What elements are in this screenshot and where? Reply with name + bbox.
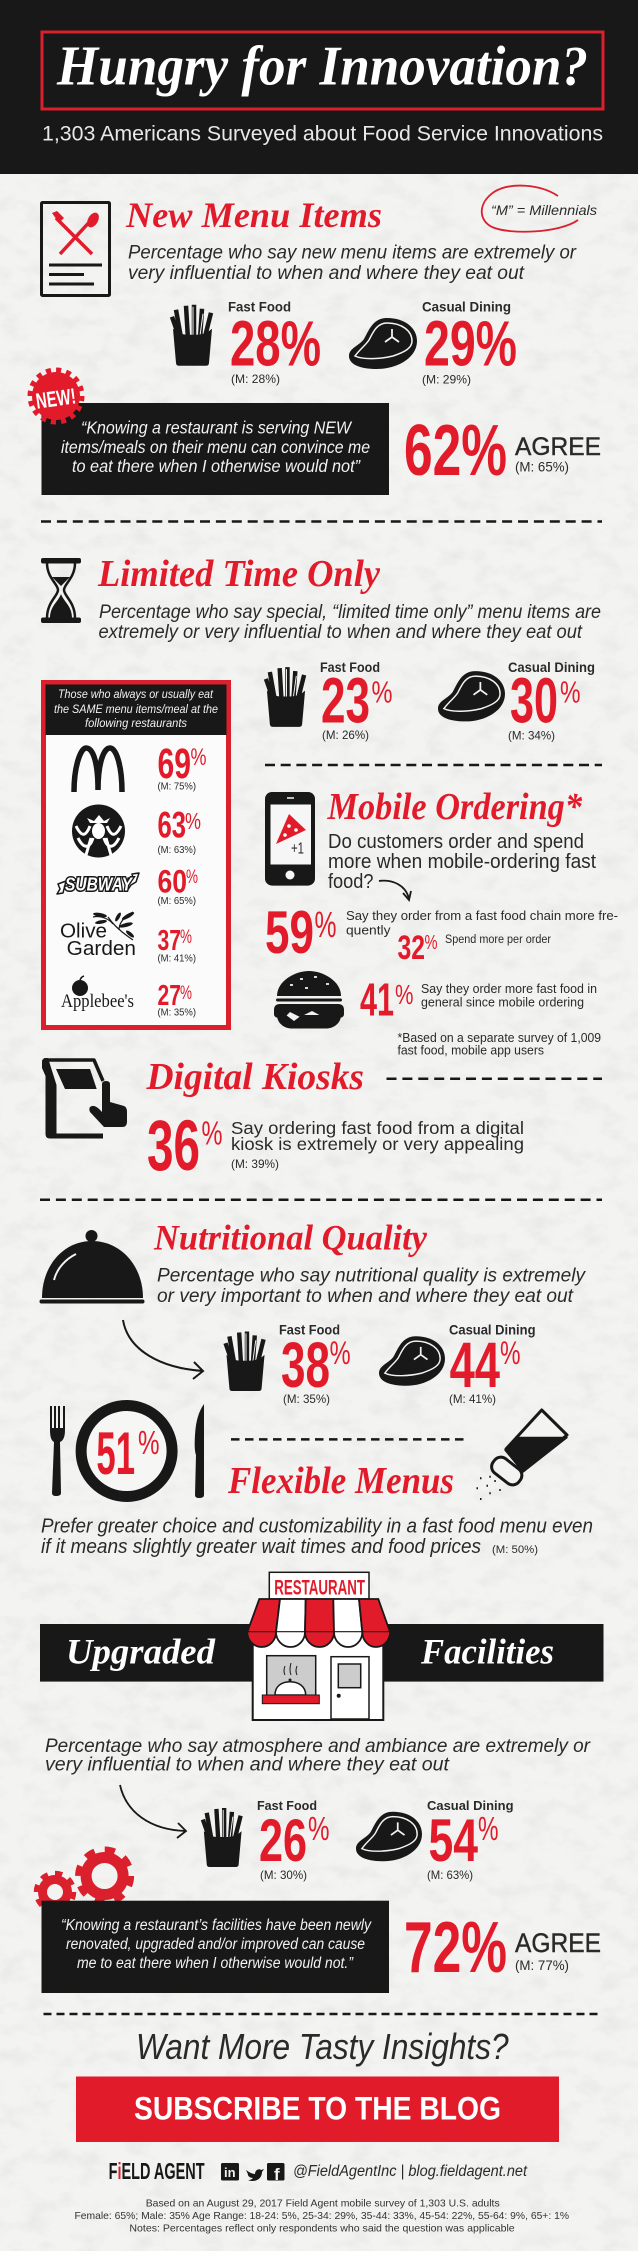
panel header: the SAME menu items/meal at the xyxy=(54,702,218,716)
stat: fast food: (M: 28%) xyxy=(231,372,280,386)
quote box xyxy=(42,1901,389,1993)
stat: 72% agree: (M: 77%) xyxy=(515,1957,569,1973)
description xyxy=(41,1516,593,1558)
stat: 59%: Say they order from a fast food chain more fre- xyxy=(346,908,618,923)
stat: 36%: % xyxy=(202,1115,222,1152)
description: extremely or very influential to when and where they eat out xyxy=(98,622,583,643)
stat: 32%: Spend more per order xyxy=(445,934,551,946)
arrow xyxy=(120,1785,186,1838)
logo: Applebee's: Applebee's xyxy=(61,991,134,1012)
description xyxy=(157,1266,587,1307)
icon: facebook xyxy=(267,2163,284,2184)
description xyxy=(231,1118,524,1171)
survey notes xyxy=(74,2198,569,2235)
stat: casual dining: 54 xyxy=(428,1807,478,1874)
description: Say ordering fast food from a digital xyxy=(231,1118,524,1138)
arrow xyxy=(379,881,411,900)
badge: new xyxy=(30,370,82,422)
footnote: fast food, mobile app users xyxy=(398,1043,544,1058)
stat: casual dining: Casual Dining xyxy=(427,1798,514,1813)
stat: Olive Garden: 37 xyxy=(158,925,181,957)
stat: 62% agree: 62% xyxy=(404,411,507,491)
stat: casual dining xyxy=(356,1798,514,1882)
description xyxy=(98,602,601,643)
quote box xyxy=(42,403,389,495)
description: very influential to when and where they eat out xyxy=(128,263,525,284)
question: more when mobile-ordering fast xyxy=(328,851,596,873)
subtitle: 1,303 Americans Surveyed about Food Service Innovations xyxy=(42,122,603,145)
stat: 62% agree: (M: 65%) xyxy=(515,460,569,474)
stat: fast food: % xyxy=(308,1810,330,1847)
icon: burger xyxy=(274,971,344,1028)
heading banner: Upgraded xyxy=(66,1632,216,1672)
survey notes: Based on an August 29, 2017 Field Agent mobile survey of 1,303 U.S. adults xyxy=(146,2198,500,2210)
stat: 32%: 32 xyxy=(398,929,425,967)
stat: Subway: % xyxy=(186,867,198,888)
panel: flexible menus xyxy=(41,1404,593,1558)
stat: Olive Garden xyxy=(158,925,196,965)
heading: New Menu Items xyxy=(125,195,382,235)
description: (M: 50%) xyxy=(492,1544,538,1556)
callout: millennials key: “M” = Millennials xyxy=(491,202,597,218)
panel: same menu items by restaurant xyxy=(44,682,228,1028)
stat: fast food: 38 xyxy=(281,1329,330,1401)
call to action xyxy=(76,2026,559,2142)
icon: plate with 51%: 51 xyxy=(96,1420,135,1487)
heading: Digital Kiosks xyxy=(146,1056,364,1098)
icon: linkedin xyxy=(221,2163,239,2180)
panel: limited time only xyxy=(41,553,601,743)
stat: casual dining: % xyxy=(560,674,580,709)
icon: restaurant storefront xyxy=(247,1572,390,1720)
stat: 59% xyxy=(265,899,618,966)
logo: Field Agent: FiELD AGENT xyxy=(109,2158,205,2184)
description: Percentage who say special, “limited time only” menu items are xyxy=(99,602,601,623)
heading: Limited Time Only xyxy=(97,553,380,595)
stat: casual dining: 30 xyxy=(510,665,558,737)
stat: casual dining: 29% xyxy=(424,308,517,380)
social handles: @FieldAgentInc | blog.fieldagent.net xyxy=(293,2163,528,2180)
survey notes: Female: 65%; Male: 35% Age Range: 18-24: 5%, 25-34: 29%, 35-44: 33%, 45-54: 22%, 55-64: 9%, 65+: 1% xyxy=(74,2210,569,2222)
logo: Olive Garden xyxy=(60,911,136,960)
stat: fast food: 23 xyxy=(321,665,370,737)
icon: phone xyxy=(265,792,315,886)
stat: Applebee's: (M: 35%) xyxy=(158,1008,196,1019)
description: Percentage who say atmosphere and ambiance are extremely or xyxy=(45,1736,591,1757)
stat: 59%: quently xyxy=(346,923,391,938)
stat: Applebee's: % xyxy=(180,983,192,1004)
icon: facebook: f xyxy=(274,2165,280,2184)
panel: digital kiosks xyxy=(42,1056,524,1186)
description: Prefer greater choice and customizability in a fast food menu even xyxy=(41,1516,593,1538)
stat: fast food: (M: 26%) xyxy=(322,728,369,742)
stat: 32%: % xyxy=(424,932,438,954)
stat: fast food: Fast Food xyxy=(228,299,291,315)
stat: fast food xyxy=(266,659,392,742)
stat: fast food xyxy=(225,1322,351,1406)
panel header: Those who always or usually eat xyxy=(58,687,214,701)
quote box: to eat there when I otherwise would not” xyxy=(72,456,361,476)
stat: 41%: general since mobile ordering xyxy=(421,995,584,1010)
stat: casual dining xyxy=(438,659,595,743)
logo: Starbucks xyxy=(72,804,125,858)
stat: fast food: (M: 30%) xyxy=(260,1868,307,1882)
icon: knife xyxy=(195,1404,204,1498)
subscribe button: SUBSCRIBE TO THE BLOG xyxy=(134,2091,501,2127)
description: or very important to when and where they eat out xyxy=(157,1286,574,1307)
stat: 41%: Say they order more fast food in xyxy=(421,981,597,996)
question: food? xyxy=(328,871,374,893)
stat: Olive Garden: (M: 41%) xyxy=(158,954,196,965)
description: if it means slightly greater wait times and food prices xyxy=(41,1536,481,1558)
panel header: following restaurants xyxy=(85,716,187,730)
panel: nutritional quality xyxy=(40,1217,587,1406)
logo: Applebee's xyxy=(61,976,134,1012)
footnote xyxy=(398,1030,601,1058)
icon: plate with 51% xyxy=(81,1406,172,1496)
description xyxy=(128,243,577,284)
description: (M: 39%) xyxy=(231,1157,279,1171)
stat: Olive Garden: % xyxy=(180,927,192,948)
logo: Olive Garden: Garden xyxy=(67,938,136,960)
panel: mobile ordering xyxy=(265,786,618,1058)
icon: phone: +1 xyxy=(291,840,304,858)
icon: gears xyxy=(36,1850,131,1911)
stat: casual dining: % xyxy=(478,1810,498,1847)
quote box: me to eat there when I otherwise would not.” xyxy=(77,1955,354,1972)
stat: casual dining: Casual Dining xyxy=(449,1322,536,1338)
stat: Applebee's: 27 xyxy=(158,980,181,1012)
panel header xyxy=(46,684,226,735)
stat: casual dining: (M: 34%) xyxy=(508,729,555,743)
stat: fast food: Fast Food xyxy=(320,659,380,675)
panel: new menu items xyxy=(30,186,601,495)
description xyxy=(45,1736,591,1776)
stat: fast food: Fast Food xyxy=(257,1798,317,1813)
logo: McDonald's xyxy=(74,748,122,792)
stat: fast food: (M: 35%) xyxy=(283,1392,330,1406)
stat: Starbucks: (M: 63%) xyxy=(158,845,196,856)
stat: casual dining: Casual Dining xyxy=(508,659,595,675)
question: Do customers order and spend xyxy=(328,831,584,853)
stat: McDonald's: 69 xyxy=(158,741,191,788)
stat: Subway: (M: 65%) xyxy=(158,896,196,907)
stat: McDonald's: % xyxy=(190,744,206,771)
heading banner xyxy=(40,1624,604,1682)
stat: 59%: % xyxy=(314,904,336,945)
heading: Nutritional Quality xyxy=(153,1217,428,1257)
heading: Flexible Menus xyxy=(227,1460,454,1502)
stat: casual dining: (M: 29%) xyxy=(422,373,471,387)
stat: casual dining: % xyxy=(500,1335,520,1371)
stat: McDonald's: (M: 75%) xyxy=(158,782,196,793)
stat: Subway: 60 xyxy=(158,864,187,900)
heading: Mobile Ordering* xyxy=(327,786,583,828)
stat: 72% agree: 72% xyxy=(404,1908,507,1988)
stat: casual dining: (M: 63%) xyxy=(427,1868,473,1882)
icon: twitter xyxy=(246,2169,264,2181)
heading banner: Facilities xyxy=(420,1632,554,1672)
logo: Subway: SUBWAY xyxy=(65,875,134,895)
stat: casual dining xyxy=(349,299,517,387)
icon: menu xyxy=(42,202,110,296)
stat: 72% agree: AGREE xyxy=(515,1928,601,1958)
stat: fast food xyxy=(203,1798,330,1882)
stat: fast food: % xyxy=(372,674,392,709)
description: kiosk is extremely or very appealing xyxy=(231,1134,524,1154)
footnote: *Based on a separate survey of 1,009 xyxy=(398,1030,601,1045)
quote box: “Knowing a restaurant is serving NEW xyxy=(81,418,352,438)
stat: 36%: 36 xyxy=(147,1107,200,1186)
footer xyxy=(74,2158,569,2235)
icon: fork xyxy=(50,1406,65,1496)
description: Percentage who say new menu items are extremely or xyxy=(128,243,577,264)
panel: upgraded facilities xyxy=(36,1572,604,1993)
logo: Olive Garden: Olive xyxy=(60,920,107,942)
question xyxy=(328,831,596,893)
stat: casual dining: (M: 41%) xyxy=(449,1392,496,1406)
icon: plate with 51%: % xyxy=(138,1424,160,1461)
badge: new: NEW! xyxy=(34,383,77,414)
survey notes: Notes: Percentages reflect only respondents who said the question was applicable xyxy=(129,2223,515,2235)
header band xyxy=(0,0,638,174)
quote box: “Knowing a restaurant’s facilities have been newly xyxy=(61,1917,372,1934)
callout: millennials key xyxy=(482,186,597,232)
icon: cloche xyxy=(40,1230,144,1304)
stat: 41% xyxy=(360,974,597,1026)
stat: fast food: 28% xyxy=(230,308,321,380)
description: very influential to when and where they eat out xyxy=(45,1755,450,1776)
title: Hungry for Innovation? xyxy=(56,36,588,98)
stat: casual dining xyxy=(379,1322,536,1406)
stat: casual dining: 44 xyxy=(450,1329,500,1401)
icon: linkedin: in xyxy=(224,2165,236,2180)
stat: fast food: 26 xyxy=(259,1807,307,1874)
description: Percentage who say nutritional quality is extremely xyxy=(157,1266,587,1286)
icon: restaurant storefront: RESTAURANT xyxy=(274,1576,365,1599)
stat: Applebee's xyxy=(158,980,196,1019)
stat: 59%: 59 xyxy=(265,899,314,966)
stat: 32% xyxy=(398,929,551,967)
stat: 41%: 41 xyxy=(360,974,394,1026)
icon: hourglass xyxy=(41,558,81,623)
icon: salt shaker xyxy=(476,1410,567,1499)
stat: Starbucks: 63 xyxy=(158,805,186,846)
icon: kiosk xyxy=(42,1058,127,1138)
stat: fast food xyxy=(172,299,321,386)
subscribe button xyxy=(76,2076,559,2142)
stat: casual dining: Casual Dining xyxy=(422,299,511,315)
stat: 62% agree: AGREE xyxy=(515,433,601,461)
stat: fast food: % xyxy=(330,1335,351,1371)
heading: Want More Tasty Insights? xyxy=(136,2026,509,2067)
stat: Starbucks: % xyxy=(185,808,201,834)
stat: fast food: Fast Food xyxy=(279,1322,340,1338)
quote box: items/meals on their menu can convince me xyxy=(61,437,370,457)
quote box: renovated, upgraded and/or improved can cause xyxy=(66,1936,365,1953)
stat: 41%: % xyxy=(395,979,414,1010)
arrow xyxy=(123,1320,203,1379)
